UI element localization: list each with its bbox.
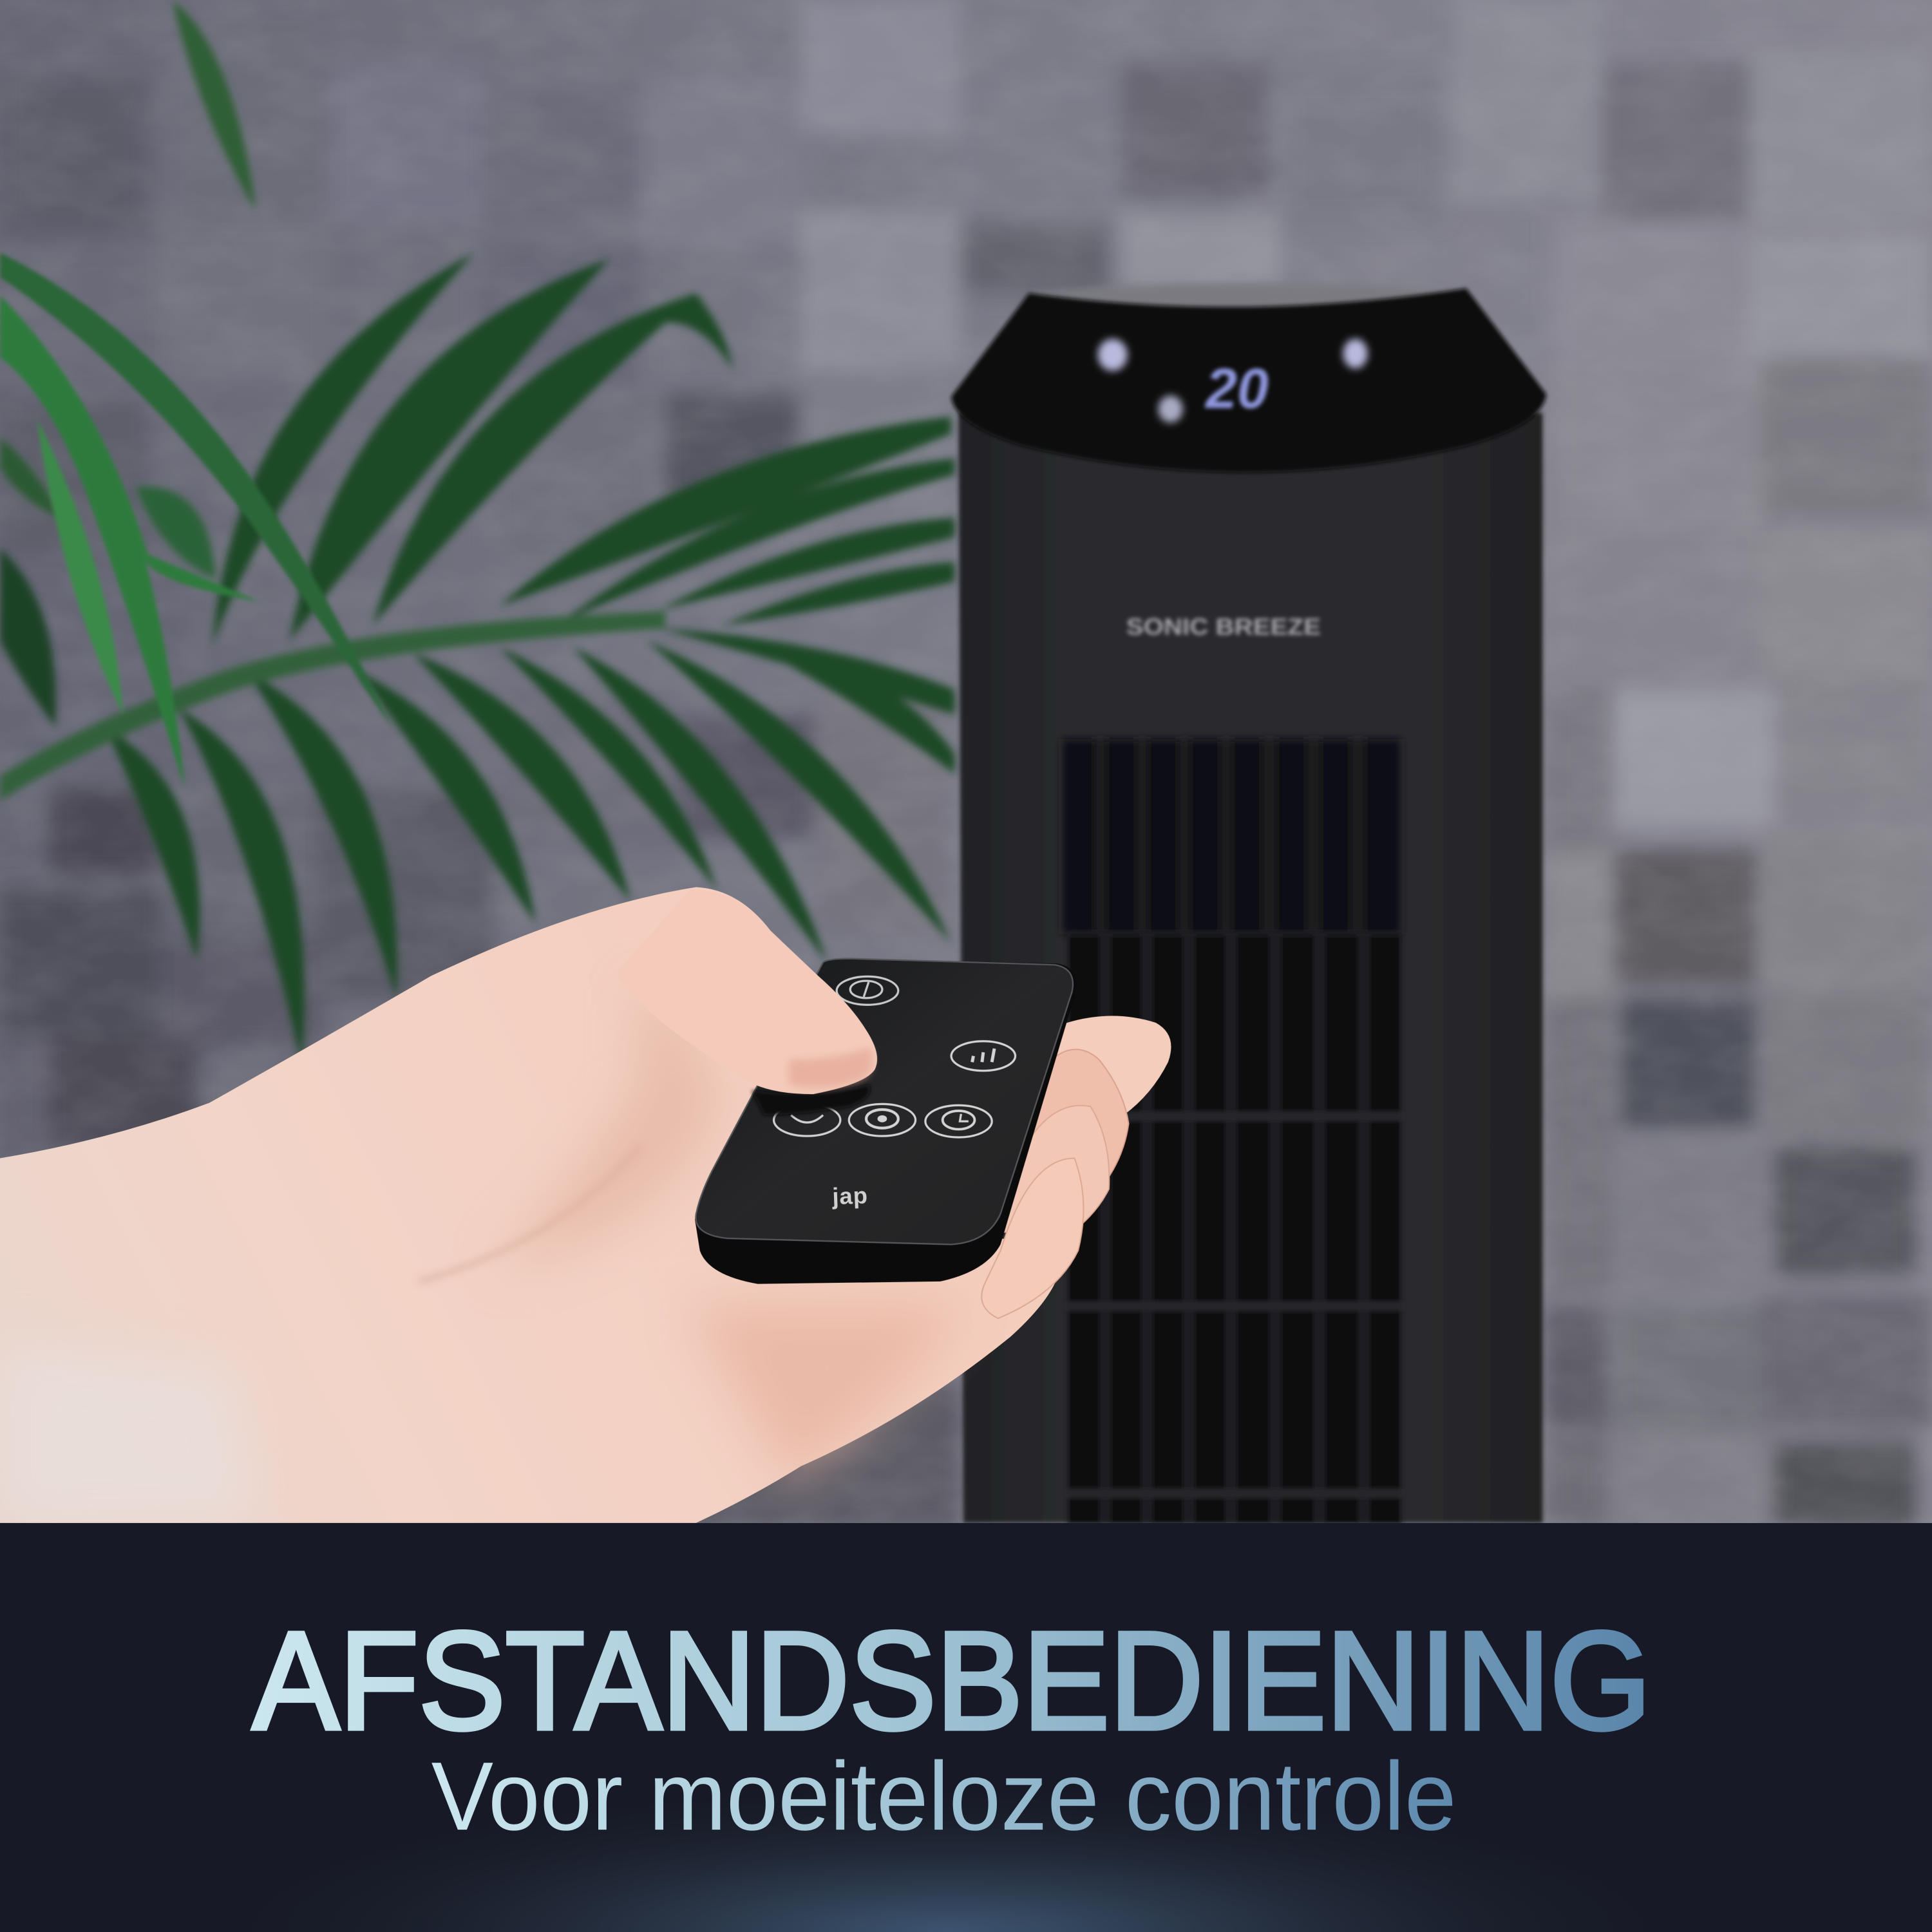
finger three bbox=[1004, 1106, 1109, 1232]
palm and wrist bbox=[0, 887, 1062, 1523]
thumb shading bbox=[788, 1047, 873, 1088]
display indicators bbox=[1098, 339, 1368, 422]
bottom banner bbox=[0, 1523, 1932, 1932]
subtitle: Voor moeiteloze controle bbox=[431, 1742, 1456, 1851]
finger one bbox=[1047, 1016, 1171, 1115]
finger four bbox=[981, 1158, 1083, 1318]
fan body bbox=[959, 413, 1542, 1523]
hand holding the remote bbox=[0, 887, 1171, 1523]
remote casing bbox=[695, 959, 1076, 1284]
title: AFSTANDSBEDIENING bbox=[252, 1602, 1651, 1758]
palm crease bbox=[419, 1146, 641, 1282]
wall background with grey tiles bbox=[0, 0, 1932, 1528]
thumb shadow on remote bbox=[752, 1084, 870, 1115]
mode button bbox=[774, 1104, 840, 1136]
remote brand: jap bbox=[831, 1182, 869, 1209]
palm plant in background bbox=[0, 0, 955, 1066]
palm shading bbox=[0, 986, 961, 1523]
banner glow bbox=[123, 1774, 1774, 1932]
temperature display: 20 bbox=[1204, 356, 1269, 420]
upper fan grille bbox=[1062, 739, 1401, 934]
foreground palm fronds bbox=[0, 252, 392, 788]
thumb over the remote bbox=[616, 889, 877, 1094]
finger two bbox=[1023, 1049, 1129, 1186]
tower fan bbox=[951, 283, 1546, 1523]
remote top face bbox=[696, 959, 1073, 1244]
power button bbox=[837, 976, 898, 1005]
timer button bbox=[925, 1105, 992, 1137]
fan brand logo: SONIC BREEZE bbox=[1126, 613, 1321, 639]
fan speed button bbox=[951, 1041, 1016, 1071]
fan control panel cap bbox=[951, 289, 1546, 473]
remote control bbox=[695, 959, 1076, 1284]
oscillation button bbox=[849, 1104, 916, 1136]
fan top rim bbox=[1035, 283, 1460, 308]
lower fan grille bbox=[1067, 931, 1402, 1523]
